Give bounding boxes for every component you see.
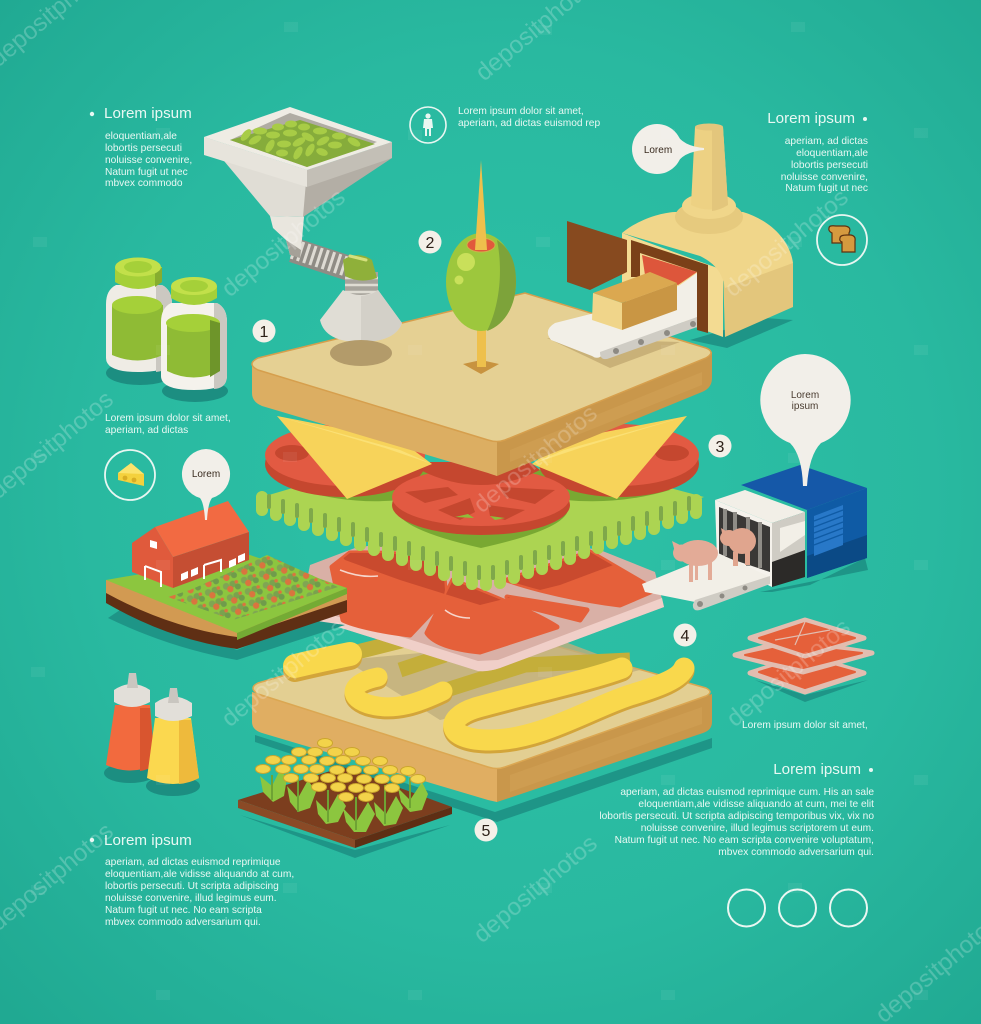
ham underside rim <box>300 530 664 671</box>
yellow bottle <box>147 688 199 784</box>
watermark: depositphotos <box>720 184 854 303</box>
tomato right <box>539 431 699 497</box>
machine speech bubble: ipsum <box>792 401 818 412</box>
corn leaves <box>260 770 428 832</box>
tomato left <box>265 431 425 497</box>
text block: top left: Lorem ipsum <box>104 105 192 122</box>
island soil <box>106 580 347 649</box>
cone <box>320 290 402 342</box>
number badge 5 <box>474 818 498 842</box>
lettuce shadow on meat <box>344 552 612 605</box>
shadow: bottom bread <box>255 735 712 822</box>
watermark: depositphotos <box>469 830 603 949</box>
oven door <box>567 221 627 290</box>
text block: bottom left: Natum fugit ut nec. No eam scripta <box>105 905 262 916</box>
text block: top left: mbvex commodo <box>105 178 183 189</box>
text block: top centre: Lorem ipsum dolor sit amet, <box>458 106 584 117</box>
oven right side <box>723 263 793 337</box>
top bread right crust <box>497 352 712 476</box>
number badge 1 <box>252 320 276 342</box>
cheese left <box>277 416 432 499</box>
oven speech bubble <box>632 124 704 174</box>
number badge 5: 5 <box>482 823 491 840</box>
oven dome <box>622 212 793 288</box>
barn end wall <box>132 527 173 588</box>
cheese slices <box>277 416 687 499</box>
oven frame <box>631 240 708 333</box>
text block: middle left <box>105 413 231 436</box>
ham stack <box>735 620 872 702</box>
text block: bottom left: aperiam, ad dictas euismod reprimique <box>105 857 281 868</box>
island shadow <box>108 610 345 660</box>
text block: bottom right: mbvex commodo adversarium qui. <box>718 847 874 858</box>
stack shadow <box>755 680 868 702</box>
text block: top left: lobortis persecuti <box>105 143 182 154</box>
text block: top centre: aperiam, ad dictas euismod rep <box>458 118 600 129</box>
soil side <box>238 800 355 848</box>
barn roof <box>155 501 249 557</box>
lettuce <box>262 462 704 585</box>
text block: bottom left: eloquentiam,ale vidisse aliquando at cum, <box>105 869 294 880</box>
text block: top right: Natum fugit ut nec <box>785 183 868 194</box>
tomato slices <box>265 424 699 535</box>
text block: ham caption: Lorem ipsum dolor sit amet, <box>742 720 868 731</box>
top bread left crust <box>252 364 497 476</box>
pig conveyor <box>642 553 770 602</box>
text block: bottom right: noluisse convenire, illud legimus scriptorem ut eum. <box>641 823 874 834</box>
mustard <box>295 640 684 743</box>
conveyor shadow on bread <box>547 338 680 368</box>
text block: bottom right: Natum fugit ut nec. No eam scripta convenire voluptatum, <box>615 835 874 846</box>
text block: top left: noluisse convenire, <box>105 155 192 166</box>
bread right crust <box>497 694 712 802</box>
watermark: depositphotos <box>217 184 351 303</box>
jars <box>106 258 228 402</box>
jar left <box>106 258 172 372</box>
bottle shadows <box>104 763 156 783</box>
oven chimney <box>691 127 728 210</box>
pig machine <box>642 465 868 610</box>
number badge 2: 2 <box>426 235 435 252</box>
text block: top left <box>90 105 192 189</box>
pipe elbow green <box>343 255 377 281</box>
sauce bottles <box>104 673 200 796</box>
text block: top centre <box>458 106 600 129</box>
text block: bottom right: Lorem ipsum <box>773 761 861 778</box>
olive on toothpick <box>446 160 516 374</box>
oven shadow <box>690 318 793 348</box>
hopper funnel right <box>303 142 392 217</box>
text block: bottom right <box>599 761 874 858</box>
jar right <box>161 277 227 390</box>
cheese right <box>532 416 687 499</box>
island grass <box>106 555 347 633</box>
coil pipe vertical <box>345 272 378 298</box>
olive body <box>446 233 516 331</box>
hopper funnel left <box>204 137 307 217</box>
top bread surface <box>252 293 711 442</box>
jar shadows <box>106 361 174 385</box>
ham slice bottom <box>750 655 864 692</box>
text block: top right: aperiam, ad dictas <box>785 136 868 147</box>
ham slice middle <box>735 640 872 672</box>
crop field <box>168 555 338 620</box>
text block: bottom left: Lorem ipsum <box>104 832 192 849</box>
oven interior fire <box>642 255 697 285</box>
white tunnel top <box>715 490 805 523</box>
hopper machine <box>204 107 402 342</box>
text block: top right: Lorem ipsum <box>767 110 855 127</box>
toothpick shaft upper <box>475 160 487 250</box>
coil pipe horizontal <box>293 250 357 271</box>
number badge 4: 4 <box>681 628 690 645</box>
corn flowers <box>256 738 426 802</box>
tunnel opening <box>715 500 772 587</box>
mustard shaded under ham <box>345 640 630 692</box>
oven chimney rings <box>675 200 743 234</box>
lettuce body <box>262 462 704 578</box>
number badge 1: 1 <box>260 324 269 341</box>
farm island <box>106 501 347 660</box>
toothpick base hole <box>463 360 499 374</box>
text block: bottom left: mbvex commodo adversarium qui. <box>105 917 261 928</box>
hopper beans <box>239 120 362 161</box>
text block: bottom right: aperiam, ad dictas euismod reprimique cum. His an sale <box>620 787 874 798</box>
lettuce shadow under tomatoes <box>300 470 670 548</box>
mustard stroke 1 <box>295 658 350 670</box>
olive pimento hole <box>467 238 495 252</box>
barn windows and doors <box>150 540 245 581</box>
text block: middle left: Lorem ipsum dolor sit amet, <box>105 413 231 424</box>
barn speech bubble: Lorem <box>192 469 220 480</box>
text block: top right: eloquentiam,ale <box>796 148 868 159</box>
text block: top left: eloquentiam,ale <box>105 131 177 142</box>
blue box <box>741 465 867 510</box>
text block: bottom left: lobortis persecuti. Ut scripta adipiscing <box>105 881 279 892</box>
mustard stroke 2 <box>354 680 443 710</box>
machine speech bubble: Lorem <box>791 390 819 401</box>
barn <box>132 501 249 588</box>
text block: bottom right: eloquentiam,ale vidisse aliquando at cum, mei te elit <box>638 799 874 810</box>
hopper spout <box>270 216 304 255</box>
pig front <box>672 540 718 582</box>
mustard stroke 3 <box>454 671 684 743</box>
icon: bread <box>817 215 867 265</box>
text block: bottom left <box>90 832 294 928</box>
red bottle <box>106 673 155 771</box>
text block: middle left: aperiam, ad dictas <box>105 425 188 436</box>
text block: bottom right: lobortis persecuti. Ut scripta adipiscing temporibus vix, vix no <box>599 811 874 822</box>
oven speech bubble: Lorem <box>644 145 672 156</box>
tomato centre <box>392 475 570 535</box>
oven factory <box>547 124 793 368</box>
bread left crust <box>252 692 497 802</box>
number badge 3: 3 <box>716 439 725 456</box>
number badge 4 <box>674 624 696 646</box>
bread top surface <box>253 622 710 768</box>
machine shadow <box>760 558 868 592</box>
icon: person <box>410 107 446 143</box>
soil top <box>238 767 452 840</box>
barn speech bubble <box>182 449 230 520</box>
watermark: depositphotos <box>722 614 856 733</box>
corn field <box>238 738 452 858</box>
top bread slice <box>252 293 712 476</box>
pig back <box>720 528 756 566</box>
oven conveyor belt <box>548 287 697 358</box>
lettuce frills <box>262 497 696 585</box>
three empty circles <box>728 890 867 926</box>
barn front wall <box>173 532 249 588</box>
icon: cheese <box>105 450 155 500</box>
watermark: depositphotos <box>217 614 351 733</box>
number badge 2 <box>418 230 442 254</box>
text block: top left: Natum fugit ut nec <box>105 167 188 178</box>
text block: top right: lobortis persecuti <box>791 160 868 171</box>
machine speech bubble <box>760 354 851 486</box>
text block: bottom left: noluisse convenire, illud legimus eum. <box>105 893 277 904</box>
field shadow <box>240 815 450 858</box>
ham slice top <box>750 620 864 656</box>
watermark: depositphotos <box>469 400 603 519</box>
bottom bread slice <box>252 622 712 802</box>
ham slice <box>308 546 664 672</box>
toothpick shaft lower <box>477 325 486 367</box>
hopper rim <box>204 137 307 187</box>
oven front side <box>622 233 723 337</box>
number badge 3 <box>708 434 732 458</box>
text block: top right: noluisse convenire, <box>781 172 868 183</box>
text block: top right <box>767 110 868 194</box>
cone shadow on bread <box>330 340 392 366</box>
bread loaf <box>593 272 677 303</box>
tunnel side <box>772 512 805 587</box>
ham meat pieces <box>332 552 655 652</box>
